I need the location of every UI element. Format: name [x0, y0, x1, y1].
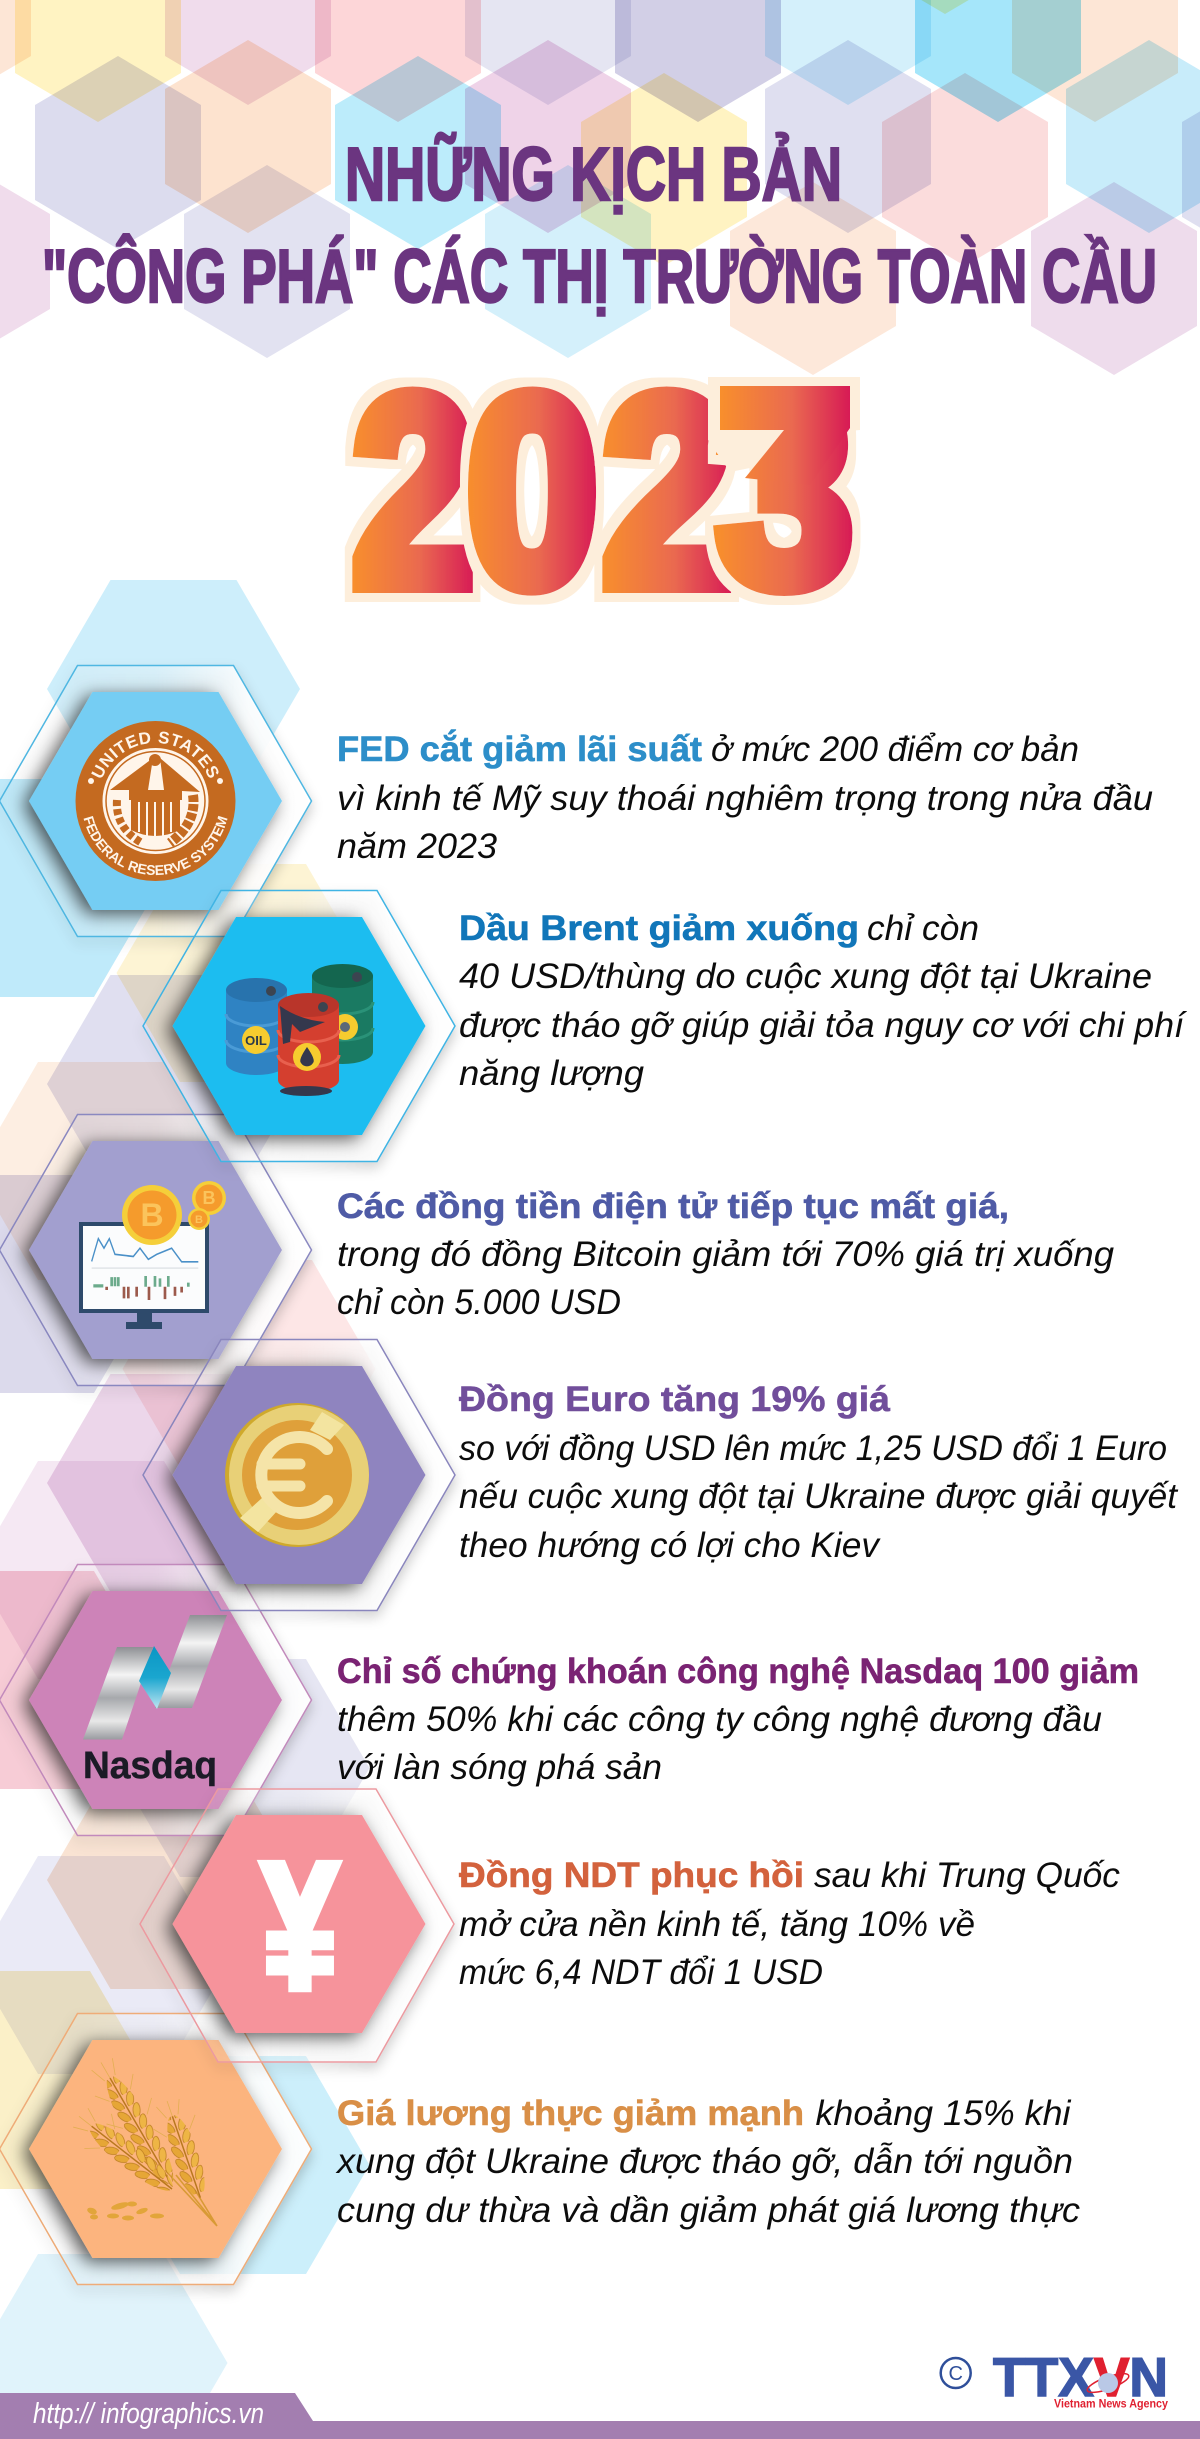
text: Brent oil: được tháo gỡ giúp giải tỏa nguy cơ với chi phí	[459, 1006, 1187, 1045]
logo: TTXVN: C	[948, 2363, 963, 2385]
icon: Federal Reserve seal: FEDERAL RESERVE SYSTEM	[84, 816, 228, 876]
text: Yuan: mức 6,4 NDT đổi 1 USD	[459, 1953, 823, 1992]
icon: Nasdaq logo	[83, 1615, 227, 1787]
text: food: cung dư thừa và dần giảm phát giá lương thực	[337, 2191, 1081, 2230]
icon: Nasdaq logo: Nasdaq	[83, 1745, 217, 1787]
panel 1: FED	[0, 664, 1153, 965]
text: Yuan: mở cửa nền kinh tế, tăng 10% về	[459, 1905, 975, 1944]
hexagon 2	[172, 917, 426, 1135]
text: Nasdaq	[337, 1652, 1139, 1787]
panel 5: Nasdaq	[0, 1564, 1139, 1836]
icon: wheat	[65, 2049, 221, 2226]
title	[42, 132, 1157, 318]
text: FED: vì kinh tế Mỹ suy thoái nghiêm trọng trong nửa đầu	[337, 779, 1153, 818]
title: NHỮNG KỊCH BẢN	[345, 132, 842, 216]
text: Euro: nếu cuộc xung đột tại Ukraine được giải quyết	[459, 1477, 1178, 1516]
icon: oil barrels	[226, 964, 373, 1096]
hexagon 6	[172, 1815, 426, 2033]
text: Brent oil	[459, 909, 1187, 1093]
text: crypto: chỉ còn 5.000 USD	[337, 1283, 621, 1322]
text: FED: năm 2023	[337, 827, 498, 866]
big year 2023	[352, 339, 860, 642]
big year 2023: 2	[352, 341, 474, 642]
icon: yuan sign	[257, 1860, 343, 1992]
hexagon 7	[29, 2040, 282, 2258]
icon: Federal Reserve seal: UNITED STATES	[91, 732, 218, 778]
text: Nasdaq: với làn sóng phá sản	[337, 1748, 662, 1787]
text: crypto: Các đồng tiền điện tử tiếp tục mất giá,	[337, 1187, 1009, 1226]
icon: Federal Reserve seal	[76, 721, 236, 881]
text: Brent oil: 40 USD/thùng do cuộc xung đột tại Ukraine	[459, 957, 1152, 996]
background: top pastel hexagon pattern	[0, 0, 1200, 375]
big year 2023: 0	[466, 339, 598, 641]
panel 2: Brent oil	[143, 890, 1187, 1162]
text: Euro: Đồng Euro tăng 19% giá	[459, 1380, 891, 1419]
big year 2023: 2	[602, 340, 733, 642]
icon: monitor with bitcoin coins: B	[140, 1197, 164, 1233]
text: FED: ở mức 200 điểm cơ bản	[711, 730, 1079, 769]
footer bar with URL	[0, 2393, 1200, 2439]
text: Brent oil: Dầu Brent giảm xuống	[459, 909, 859, 948]
text: Euro: theo hướng có lợi cho Kiev	[459, 1526, 882, 1565]
icon: monitor with bitcoin coins: B	[202, 1188, 216, 1208]
icon: euro coin	[225, 1403, 369, 1547]
text: Euro	[459, 1380, 1178, 1565]
background: large pastel hexagons behind the icons	[0, 580, 376, 2439]
icon: monitor with bitcoin coins: B	[195, 1214, 203, 1226]
text: FED: FED cắt giảm lãi suất	[337, 729, 702, 769]
text: crypto	[337, 1187, 1115, 1322]
hexagon 5	[29, 1591, 282, 1809]
hexagon 4	[172, 1366, 426, 1584]
panel 6: Yuan	[140, 1789, 1120, 2062]
icon: monitor with bitcoin coins	[81, 1181, 226, 1329]
panel 3: crypto	[0, 1114, 1115, 1386]
hexagon 1	[29, 692, 282, 910]
icon: oil barrels: OIL	[245, 1033, 267, 1048]
text: crypto: trong đó đồng Bitcoin giảm tới 70% giá trị xuống	[337, 1235, 1115, 1274]
panel 7: food	[0, 2014, 1081, 2284]
text: food: xung đột Ukraine được tháo gỡ, dẫn tới nguồn	[335, 2142, 1073, 2181]
text: food: khoảng 15% khi	[816, 2094, 1072, 2133]
text: FED	[337, 729, 1153, 866]
text: food	[335, 2094, 1081, 2230]
text: Nasdaq: Chỉ số chứng khoán công nghệ Nasdaq 100 giảm	[337, 1652, 1139, 1691]
logo: TTXVN: TTXVN	[993, 2346, 1168, 2408]
text: Nasdaq: thêm 50% khi các công ty công nghệ đương đầu	[337, 1700, 1102, 1739]
big year 2023: 3	[716, 339, 853, 642]
text: food: Giá lương thực giảm mạnh	[337, 2094, 804, 2133]
panel 4: Euro	[143, 1340, 1178, 1610]
text: Yuan	[459, 1856, 1120, 1992]
text: Yuan: Đồng NDT phục hồi	[459, 1856, 804, 1895]
text: Brent oil: năng lượng	[459, 1054, 645, 1093]
text: Brent oil: chỉ còn	[867, 909, 979, 948]
text: Yuan: sau khi Trung Quốc	[814, 1856, 1120, 1895]
footer bar with URL: http:// infographics.vn	[33, 2398, 264, 2430]
text: Euro: so với đồng USD lên mức 1,25 USD đổi 1 Euro	[459, 1429, 1167, 1468]
hexagon 3	[29, 1141, 282, 1359]
logo: TTXVN: Vietnam News Agency	[1054, 2396, 1168, 2410]
